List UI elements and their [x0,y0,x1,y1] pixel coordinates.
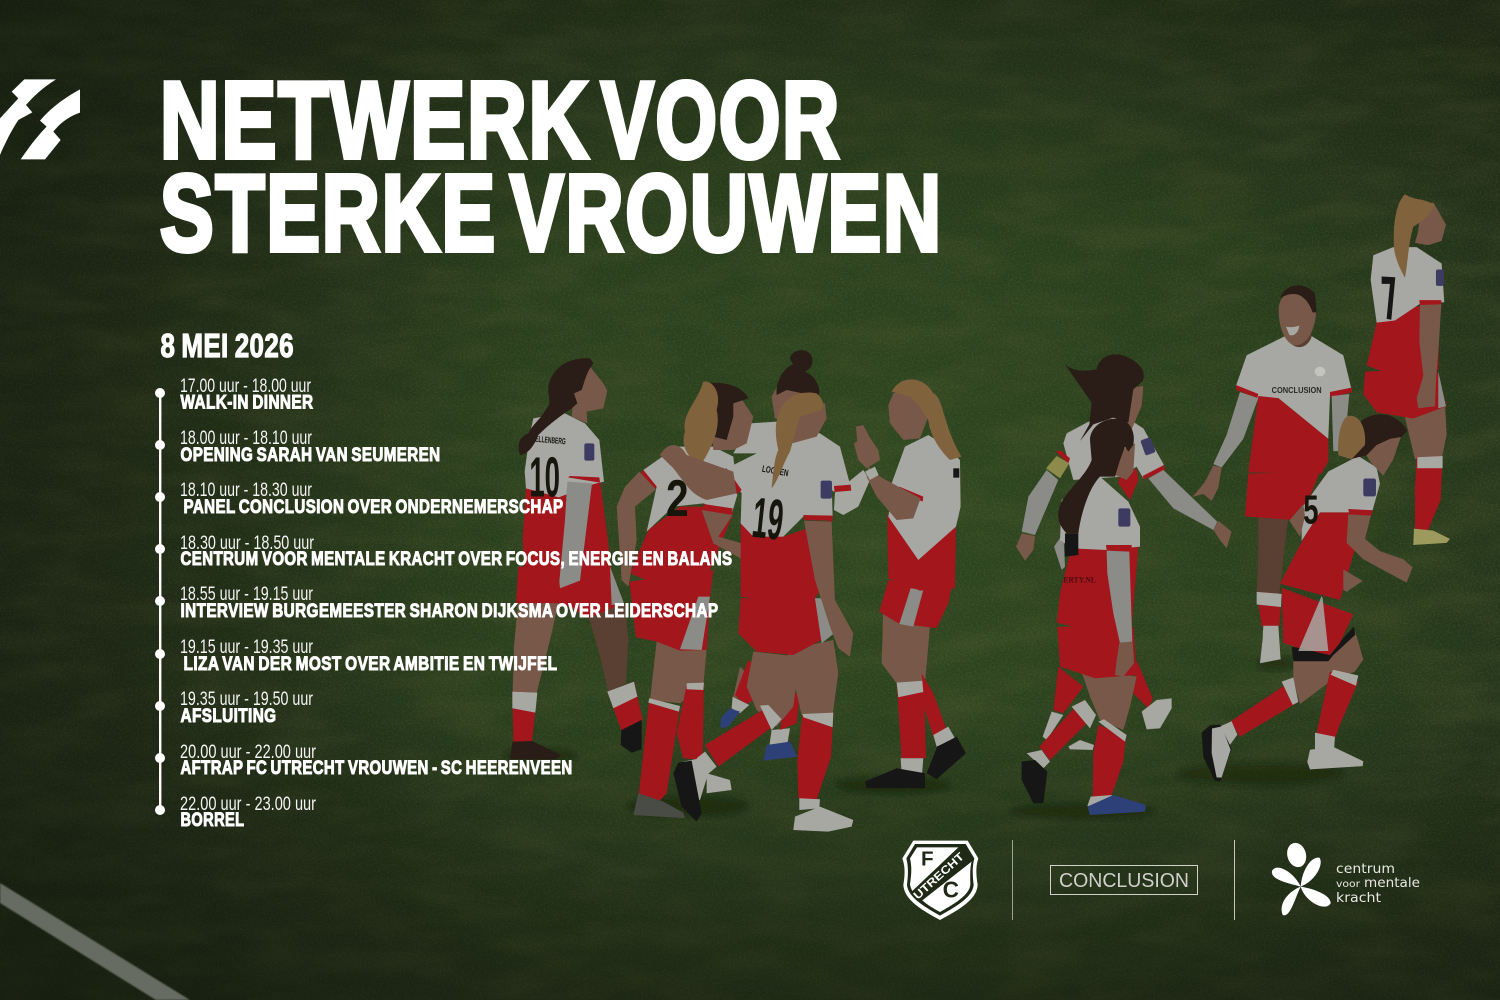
schedule item 4: CENTRUM VOOR MENTALE KRACHT OVER FOCUS, ENERGIE EN BALANS [180,549,732,570]
photo: captain and ponytail players [1010,354,1232,819]
logo: centrum voor mentale kracht [1272,841,1420,915]
schedule item 1: 17.00 uur - 18.00 uur [180,376,311,397]
schedule item 1 [180,376,314,414]
schedule item 2 [180,428,440,466]
schedule item 9 [180,794,317,831]
schedule item 6: LIZA VAN DER MOST OVER AMBITIE EN TWIJFEL [184,654,558,675]
schedule item 4: 18.30 uur - 18.50 uur [180,533,314,554]
logo: FC Utrecht crest [902,841,978,920]
player: number 10 [510,358,643,759]
player: laughing with Conclusion shirt [1193,285,1352,663]
divider [1012,840,1013,920]
title: STERKE [160,152,497,274]
schedule item 7 [180,689,313,727]
schedule item 8: 20.00 uur - 22.00 uur [180,742,317,763]
logo: FC Utrecht crest: C [943,877,959,903]
schedule item 3 [180,480,564,518]
player: captain with armband [1016,354,1232,750]
schedule item 9: 22.00 uur - 23.00 uur [180,794,317,815]
photo: players on the far right [1177,194,1450,784]
schedule item 3: 18.10 uur - 18.30 uur [180,480,312,501]
logo: Conclusion: CONCLUSION [1059,870,1189,892]
schedule item 6: 19.15 uur - 19.35 uur [180,637,313,658]
schedule item 8 [180,742,572,779]
schedule item 8: AFTRAP FC UTRECHT VROUWEN - SC HEERENVEEN [180,758,572,779]
schedule item 4 [180,533,732,570]
schedule item 9: BORREL [180,810,244,831]
player: number 19: 19 [749,486,786,553]
logo: centrum voor mentale kracht: kracht [1336,890,1381,906]
player: number 19: LOCHEN [761,464,789,478]
logo: centrum voor mentale kracht: centrum [1336,861,1395,877]
logo: FC Utrecht crest: F [921,848,934,871]
date heading: 8 MEI 2026 [160,327,294,364]
title: NETWERK [160,60,590,182]
player: laughing with Conclusion shirt: CONCLUSION [1272,386,1322,395]
player: high five on right [854,379,966,788]
schedule item 1: WALK-IN DINNER [180,392,314,414]
player: ponytail with back to viewer: ERTY.NL [1063,576,1096,585]
title: VOOR [601,60,841,182]
title [160,60,943,274]
logo: FC Utrecht crest: UTRECHT [912,851,967,902]
logo: centrum voor mentale kracht: mentale [1364,875,1420,891]
schedule item 2: 18.00 uur - 18.10 uur [180,428,312,449]
player: number 10: 10 [529,447,560,510]
schedule item 2: OPENING SARAH VAN SEUMEREN [180,445,440,466]
schedule item 5 [180,584,718,622]
player: number 2: 2 [666,469,689,527]
player: number 19 [660,393,853,832]
player: number 5 curly hair [1202,414,1413,782]
player: number 10: ELLENBERG [535,434,566,446]
timeline rail [155,388,165,815]
schedule item 6 [180,637,558,675]
player: back centre with bun [721,350,870,761]
player: number 5 curly hair: 5 [1303,487,1319,533]
player: number 7 [1363,194,1450,545]
schedule item 5: INTERVIEW BURGEMEESTER SHARON DIJKSMA OVER LEIDERSCHAP [180,601,718,622]
schedule item 3: PANEL CONCLUSION OVER ONDERNEMERSCHAP [184,497,564,518]
logo: Conclusion [1050,866,1198,894]
player: ponytail with back to viewer [1022,419,1146,815]
logo: centrum voor mentale kracht: voor [1336,879,1361,890]
schedule item 7: 19.35 uur - 19.50 uur [180,689,313,710]
photo: group of players celebrating [503,350,966,832]
schedule item 5: 18.55 uur - 19.15 uur [180,584,313,605]
title: VROUWEN [510,152,943,274]
player: number 2 [617,382,785,818]
schedule item 7: AFSLUITING [180,706,276,727]
divider [1234,840,1235,920]
logo: white slashes [0,79,80,159]
